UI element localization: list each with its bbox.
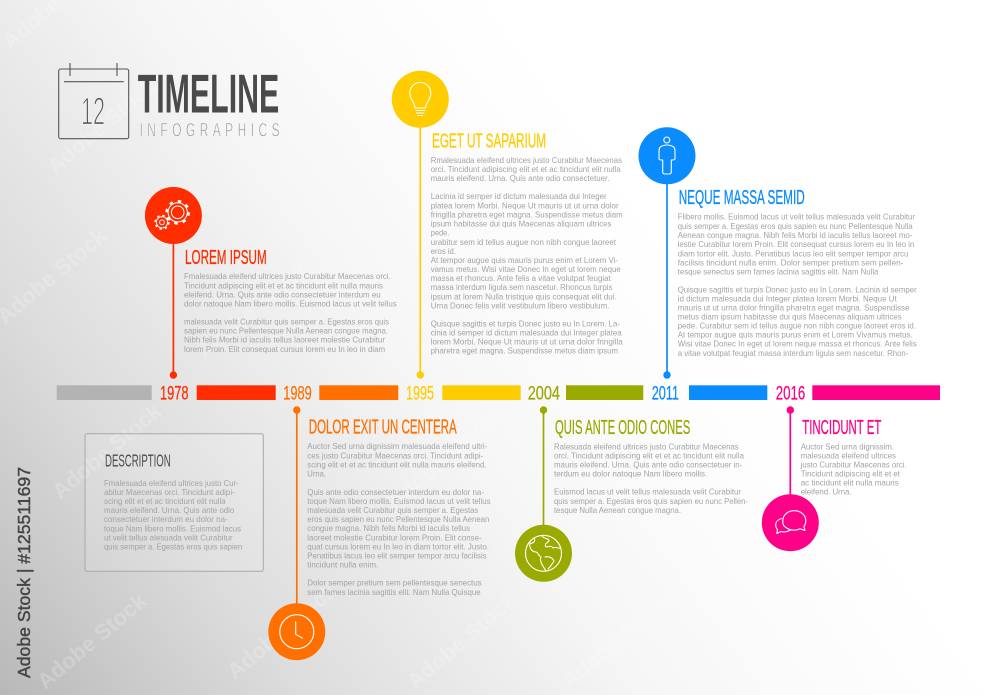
marker 2011: [663, 371, 671, 379]
icon: person: [638, 127, 696, 184]
icon: gears: [145, 187, 202, 244]
text: quis ante odio cones: orci. Tincidunt adipiscing elit et et ac tincidunt elit nulla: [554, 450, 744, 460]
text: tincidunt et: eleifend. Urna.: [801, 487, 852, 497]
watermark pattern: Adobe Stock: [842, 468, 962, 574]
text: eget ut saparium: orci. Tincidunt adipiscing elit et et ac tincidunt elit nulla: [431, 164, 621, 174]
text: neque massa semid: diam tortor elit. Justo. Penatibus lacus leo elit semper tempor arcu: [678, 248, 909, 258]
text: neque massa semid: Flibero mollis. Euismod lacus ut velit tellus malesuada velit Curabitur: [678, 212, 915, 222]
icon: clock: [268, 603, 325, 660]
text: quis ante odio cones: Ralesuada eleifend ultrices justo Curabitur Maecenas: [554, 441, 739, 451]
text: lorem ipsum: Tincidunt adipiscing elit et et ac tincidunt elit nulla mauris: [184, 280, 384, 290]
watermark pattern: Adobe Stock: [712, 408, 832, 514]
heading: tincidunt et: TINCIDUNT ET: [802, 416, 882, 439]
panel: 2004 quis ante odio cones: [515, 406, 748, 582]
text: eget ut saparium: massa interdum ligula sem nascetur. Rhoncus turpis: [431, 282, 613, 292]
stock id label: Adobe Stock | #125511697: [14, 467, 34, 678]
text: neque massa semid: quis semper a. Egestas eros quis sapien eu nunc Pellentesque Nulla: [678, 221, 913, 231]
text: neque massa semid: metus diam ipsum habitasse dui quis Maecenas aliquam ultrices: [678, 312, 902, 322]
text: quis ante odio cones: quis semper a. Egestas eros quis sapien eu nunc Pellen-: [554, 496, 748, 506]
marker 1995: [417, 371, 424, 379]
panel: 1989 dolor exit un centera: [268, 406, 491, 660]
text: neque massa semid: lestie Curabitur lorem Proin. Elit consequat cursus lorem eu In leo in: [678, 239, 915, 249]
text: quis ante odio cones: mauris eleifend. Urna. Quis ante odio consectetuer in-: [554, 460, 742, 470]
connector 2011: [666, 182, 668, 375]
text: lorem ipsum: eleifend. Urna. Quis ante odio consectetuer interdum eu: [184, 289, 381, 299]
text: eget ut saparium: eros id.: [431, 246, 456, 256]
watermark pattern: Adobe Stock: [32, 588, 152, 694]
text: tincidunt et: Tincidunt adipiscing elit et et: [801, 469, 901, 479]
panel: 1978 lorem ipsum: [145, 187, 397, 379]
title: TIMELINE: [138, 63, 279, 124]
text: dolor exit un centera: Dolor semper pretium sem pellentesque senectus: [307, 578, 482, 588]
marker 2004: [540, 406, 547, 414]
text: neque massa semid: a vitae volutpat feugiat massa interdum ligula sem nascetur. Rhon-: [678, 348, 908, 358]
marker 1978: [170, 371, 177, 379]
panel: 2011 neque massa semid: [638, 127, 917, 379]
connector 1978: [172, 240, 174, 375]
text: dolor exit un centera: Auctor Sed urna dignissim malesuada eleifend ultri-: [307, 441, 487, 451]
icon: calendar: [59, 63, 129, 139]
text: lorem ipsum: Nibh felis Morbi id iaculis tellus laoreet molestie Curabitur: [184, 335, 385, 345]
watermark pattern: Adobe Stock: [402, 588, 522, 694]
watermark pattern: Adobe Stock: [42, 73, 162, 179]
description text: [104, 478, 242, 552]
text: quis ante odio cones: terdum eu dolor natoque Nam libero mollis.: [554, 469, 707, 479]
watermark pattern: Adobe Stock: [192, 258, 312, 364]
text: dolor exit un centera: Urna.: [307, 469, 326, 479]
text: neque massa semid: tesque senectus sem fames lacinia sagittis elit. Nam Nulla: [678, 266, 879, 276]
icon: light bulb: [392, 71, 449, 128]
connector 1989: [296, 410, 298, 606]
icon: globe: [515, 525, 572, 582]
connector 1995: [419, 125, 421, 375]
text: dolor exit un centera: scing elit et et ac tincidunt elit nulla mauris eleifend.: [307, 460, 487, 470]
marker 1989: [293, 406, 300, 414]
watermark pattern: Adobe Stock: [382, 408, 502, 514]
text: eget ut saparium: Rmalesuada eleifend ultrices justo Curabitur Maecenas: [431, 155, 623, 165]
text: eget ut saparium: Quisque sagittis et turpis Donec justo eu In Lorem. La-: [431, 318, 620, 328]
text: tincidunt et: ac tincidunt elit nulla mauris: [801, 478, 899, 488]
text: tincidunt et: Auctor Sed urna dignissim.: [801, 441, 894, 451]
description text: consectetuer interdum eu dolor na-: [104, 514, 228, 524]
description text: abitur Maecenas orci. Tincidunt adipi-: [104, 487, 235, 497]
text: lorem ipsum: malesuada velit Curabitur quis semper a. Egestas eros quis: [184, 317, 390, 327]
timeline bar: [57, 382, 940, 404]
text: eget ut saparium: vamus metus. Wisi vitae Donec In eget ut lorem neque: [431, 264, 621, 274]
panel: 2016 tincidunt et: [762, 406, 907, 551]
text: tincidunt et: [800, 441, 907, 497]
text: lorem ipsum: [184, 271, 397, 354]
heading: eget ut saparium: EGET UT SAPARIUM: [432, 129, 546, 152]
text: tincidunt et: malesuada eleifend ultrices: [801, 450, 897, 460]
text: dolor exit un centera: Penatibus lacus leo elit semper tempor arcu facilisis: [307, 551, 487, 561]
header: calendar icon and title: [59, 63, 280, 142]
watermark pattern: Adobe Stock: [557, 588, 677, 694]
text: eget ut saparium: cinia id semper id dictum malesuada dui Integer platea: [431, 328, 622, 338]
year 2004: 2004: [528, 382, 560, 404]
marker 2016: [787, 406, 794, 414]
text: eget ut saparium: platea lorem Morbi. Neque Ut mauris ut ut urna dolor: [431, 200, 619, 210]
heading: dolor exit un centera: DOLOR EXIT UN CENTERA: [309, 415, 457, 438]
text: lorem ipsum: sapien eu nunc Pellentesque Nulla Aenean congue magna.: [184, 326, 388, 336]
watermark pattern: Adobe Stock: [712, 68, 832, 174]
description text: mauris eleifend. Urna. Quis ante odio: [104, 505, 234, 515]
text: eget ut saparium: At tempor augue quis mauris purus enim et Lorem Vi-: [431, 255, 618, 265]
text: dolor exit un centera: Quis ante odio consectetuer interdum eu dolor na-: [307, 487, 484, 497]
text: quis ante odio cones: [554, 441, 748, 515]
year 1995: 1995: [406, 382, 434, 404]
year 1978: 1978: [160, 382, 188, 404]
connector 2004: [542, 410, 544, 528]
text: lorem ipsum: lorem Proin. Elit consequat cursus lorem eu In leo in diam: [184, 344, 385, 354]
text: eget ut saparium: [431, 155, 623, 356]
text: eget ut saparium: ipsum habitasse dui quis Maecenas aliquam ultrices: [431, 219, 612, 229]
text: dolor exit un centera: congue magna. Nibh felis Morbi id iaculis tellus: [307, 523, 471, 533]
text: eget ut saparium: Lacinia id semper id dictum malesuada dui Integer: [431, 191, 607, 201]
text: eget ut saparium: massa et rhoncus. Ante felis a vitae volutpat feugiat: [431, 273, 611, 283]
text: eget ut saparium: pharetra eget magna. Suspendisse metus diam ipsum: [431, 346, 618, 356]
text: dolor exit un centera: laoreet molestie Curabitur lorem Proin. Elit conse-: [307, 532, 482, 542]
description heading: DESCRIPTION: [105, 451, 171, 471]
watermark pattern: Adobe Stock: [47, 398, 167, 504]
heading: neque massa semid: NEQUE MASSA SEMID: [679, 186, 805, 209]
text: neque massa semid: id dictum malesuada dui Integer platea lorem Morbi. Neque Ut: [678, 293, 897, 303]
description text: toque Nam libero mollis. Euismod lacus: [104, 523, 242, 533]
icon: chat bubbles: [762, 494, 819, 551]
text: lorem ipsum: dolor natoque Nam libero mollis. Euismod lacus ut velit tellus: [184, 298, 397, 308]
text: dolor exit un centera: quat cursus lorem eu In leo in diam tortor elit. Justo.: [307, 541, 489, 551]
subtitle: INFOGRAPHICS: [140, 120, 280, 142]
description text: scing elit et et ac tincidunt elit nulla: [104, 496, 226, 506]
text: dolor exit un centera: sem fames lacinia sagittis elit. Nam Nulla Quisque: [307, 587, 481, 597]
text: neque massa semid: Wisi vitae Donec In eget ut lorem neque massa et rhoncus. Ante felis: [678, 339, 917, 349]
text: eget ut saparium: mauris eleifend. Urna. Quis ante odio consectetuer.: [431, 173, 609, 183]
text: dolor exit un centera: ces justo Curabitur Maecenas orci. Tincidunt adipi-: [307, 450, 483, 460]
text: eget ut saparium: pede.: [431, 228, 449, 238]
watermark pattern: Adobe Stock: [527, 238, 647, 344]
panel: description: [85, 434, 263, 571]
text: neque massa semid: mauris ut ut urna dolor fringilla pharetra eget magna. Suspendisse: [678, 302, 910, 312]
year 2011: 2011: [652, 382, 679, 404]
text: lorem ipsum: Fmalesuada eleifend ultrices justo Curabitur Maecenas orci.: [184, 271, 391, 281]
text: neque massa semid: Aenean congue magna. Nibh felis Morbi id iaculis tellus laoreet mo-: [678, 230, 912, 240]
description text: Fmalesuada eleifend ultrices justo Cur-: [104, 478, 239, 488]
text: quis ante odio cones: Euismod lacus ut velit tellus malesuada velit Curabitur: [554, 487, 741, 497]
text: neque massa semid: At tempor augue quis mauris purus enim et Lorem Vivamus metus.: [678, 330, 913, 340]
description text: ut velit tellus alesuada velit Curabitur: [104, 532, 233, 542]
watermark pattern: Adobe Stock: [857, 588, 977, 694]
text: dolor exit un centera: eros quis sapien eu nunc Pellentesque Nulla Aenean: [307, 514, 489, 524]
text: dolor exit un centera: malesuada velit Curabitur quis semper a. Egestas: [307, 505, 479, 515]
icon: calendar: 12: [81, 91, 105, 134]
year 2016: 2016: [776, 382, 805, 404]
text: eget ut saparium: lorem Morbi. Neque Ut mauris ut ut urna dolor fringilla: [431, 337, 623, 347]
text: dolor exit un centera: tincidunt nulla enim.: [307, 559, 378, 569]
panel: 1995 eget ut saparium: [392, 71, 623, 379]
text: eget ut saparium: fringilla pharetra eget magna. Suspendisse metus diam: [431, 209, 623, 219]
text: eget ut saparium: Urna Donec felis velit vestibulum libero vestibulum.: [431, 300, 609, 310]
watermark pattern: Adobe Stock: [372, 83, 492, 189]
watermark pattern: Adobe Stock: [862, 238, 982, 344]
text: neque massa semid: Quisque sagittis et turpis Donec justo eu In Lorem. Lacinia id semper: [678, 284, 917, 294]
text: quis ante odio cones: tesque Nulla Aenean congue magna.: [554, 505, 681, 515]
text: neque massa semid: pede. Curabitur sem id tellus augue non nibh congue laoreet eros id.: [678, 321, 916, 331]
text: eget ut saparium: ipsum at lorem Nulla tristique quis consequat elit dui.: [431, 291, 617, 301]
text: neque massa semid: facilisis tincidunt nulla enim. Dolor semper pretium sem pellen-: [678, 257, 903, 267]
year 1989: 1989: [283, 382, 312, 404]
connector 2016: [789, 410, 791, 497]
watermark pattern: Adobe Stock: [222, 578, 342, 684]
text: neque massa semid: [678, 212, 917, 358]
text: tincidunt et: justo Curabitur Maecenas orci.: [800, 460, 907, 470]
text: dolor exit un centera: toque Nam libero mollis. Euismod lacus ut velit tellus: [307, 496, 491, 506]
text: eget ut saparium: urabitur sem id tellus augue non nibh congue laoreet: [431, 237, 617, 247]
heading: lorem ipsum: LOREM IPSUM: [185, 246, 267, 269]
description text: quis semper a. Egestas eros quis sapien: [104, 542, 242, 552]
heading: quis ante odio cones: QUIS ANTE ODIO CONES: [555, 416, 690, 439]
text: dolor exit un centera: [307, 441, 491, 597]
